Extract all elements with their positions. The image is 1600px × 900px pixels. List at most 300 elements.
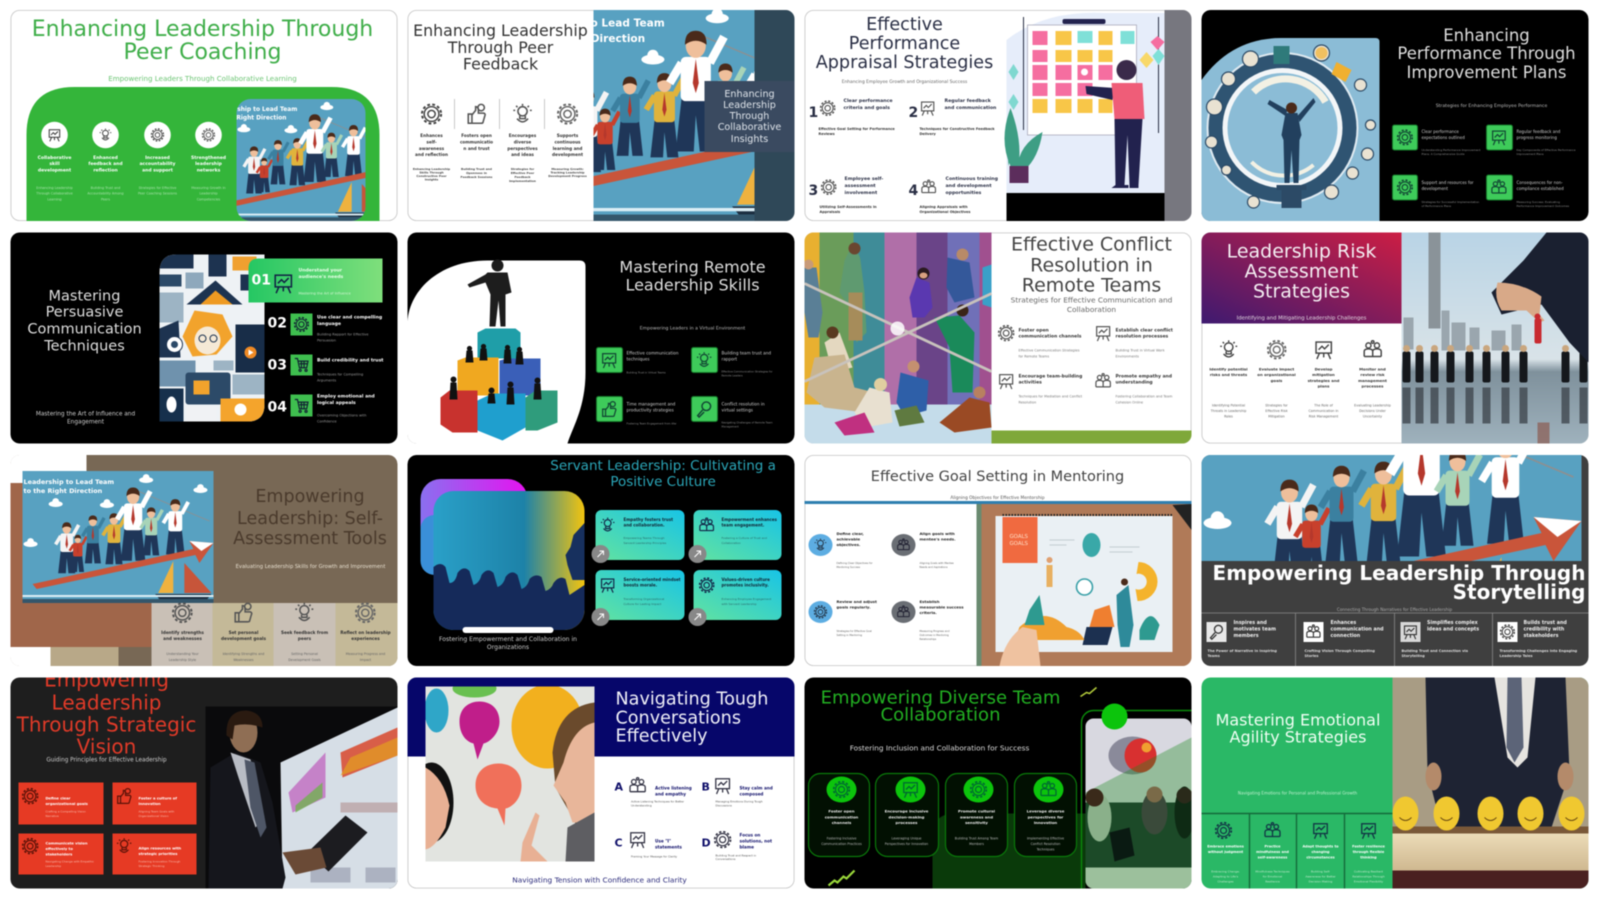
column: reflection: Reflect on leadership	[340, 630, 391, 635]
item 1: 1	[808, 105, 818, 121]
title: Leadership Skills	[625, 276, 760, 294]
item A: Active Listening Techniques for Better	[631, 800, 685, 804]
photo: suit and smiley eggs	[1392, 678, 1588, 888]
item C: Use "I"	[655, 838, 671, 844]
column sublabels: Threats in Leadership	[1210, 409, 1246, 413]
card: empowerment: Empowerment enhances	[722, 517, 777, 522]
column: diverse perspectives: Conflict Resolution	[1031, 842, 1060, 846]
item: communication	[596, 348, 679, 374]
illustration: team on seesaw: to the Right Direction	[214, 115, 286, 121]
column: open channels: channels	[832, 820, 852, 825]
column sublabels: Mitigation	[1268, 414, 1285, 418]
column labels: processes	[1362, 384, 1384, 389]
subtitle: Enhancing Employee Growth and Organizational Success	[842, 79, 968, 85]
column: builds trust	[1498, 620, 1578, 658]
subtitle: Connecting Through Narratives for Effective Leadership	[1337, 607, 1452, 612]
item: define objectives: Mentoring Success	[836, 565, 861, 569]
illustration: team on seesaw: to the Right Direction	[516, 33, 645, 45]
item C: Framing Your Message for Clarity	[631, 854, 677, 858]
card: Empowering Leadership Through Strategic Vision	[10, 668, 398, 888]
callout: insights: Through	[729, 111, 769, 122]
item: empathy: Cohesion Online	[1116, 400, 1143, 404]
card: Effective Conflict Resolution in Remote Teams	[804, 232, 1192, 444]
column: inspires: motivates team	[1234, 627, 1276, 633]
icons row	[41, 122, 222, 148]
column labels	[1209, 366, 1387, 389]
column sublabels: Measuring Growth:	[551, 167, 584, 171]
box: define goals	[18, 782, 104, 824]
column: open channels	[808, 774, 870, 856]
card: service mindset: Transforming Organizational	[622, 597, 665, 601]
column: builds trust: credibility with	[1524, 627, 1565, 633]
item 4: opportunities	[946, 190, 982, 196]
title: Empowering Diverse Team	[821, 688, 1060, 708]
card: Enhancing Performance Through Improvement Plans	[1202, 10, 1588, 221]
title: Remote Teams	[1022, 274, 1161, 296]
column labels: communicatio	[460, 139, 493, 144]
column sublabels: Strategies for	[1265, 404, 1288, 408]
item: measurable criteria: Establish	[920, 599, 940, 604]
title: Leadership: Self-	[237, 509, 383, 529]
box: innovation: Foster a culture of	[138, 796, 177, 800]
card: empathy: Servant Leadership Principles	[624, 541, 667, 545]
title: Positive Culture	[610, 474, 716, 490]
card: service mindset: boosts morale.	[624, 583, 658, 588]
gradient header	[1202, 232, 1402, 324]
column: resilience: Emotional Flexibility	[1354, 880, 1383, 884]
column sublabels: Risk Management	[1309, 414, 1339, 418]
title: Effective Conflict	[1011, 234, 1172, 256]
item: conflict resolution: virtual settings	[722, 408, 753, 412]
card: values culture: Values-driven culture	[722, 577, 770, 582]
item: measurable criteria: Relationships	[920, 637, 937, 641]
illustration: leader on colored blocks	[408, 260, 586, 444]
column sublabels: Uncertainty	[1363, 414, 1382, 418]
item: define objectives	[808, 531, 873, 569]
column: feedback: Setting Personal	[291, 652, 318, 656]
item: support and resources: of Performance Plans	[1422, 204, 1452, 208]
item: define objectives: Define clear,	[836, 531, 864, 536]
column: inclusive decisions: decision-making	[889, 814, 925, 819]
box: innovation: innovation	[138, 802, 161, 806]
item: review goals: Setting in Mentoring	[836, 633, 862, 637]
column: resilience: Cultivating Resilient	[1354, 870, 1384, 874]
column labels: Evaluate impact	[1259, 366, 1294, 372]
box: define goals: organizational goals	[46, 802, 89, 806]
subtitle: Identifying and Mitigating Leadership Challenges	[1237, 316, 1367, 322]
title: Empowering Leadership Through	[1213, 561, 1586, 585]
title: Performance Through	[1397, 44, 1576, 63]
box: define goals: Define clear	[46, 796, 71, 800]
column labels: skill	[49, 161, 60, 167]
item 3: Appraisals	[820, 210, 840, 214]
title: Enhancing Leadership Through	[32, 17, 373, 42]
illustration: silhouettes gradient panel	[420, 479, 584, 633]
column: inclusive decisions: processes	[896, 820, 918, 825]
item: consequences: compliance established	[1516, 186, 1564, 191]
subtitle: Strategies for Enhancing Employee Performance	[1436, 103, 1547, 109]
card: empowerment: Collaboration	[722, 541, 741, 545]
column: open channels: communication	[825, 814, 858, 819]
column labels: Collaborative	[38, 155, 71, 161]
item 1	[808, 98, 895, 136]
column sublabels: Accountability Among	[87, 192, 124, 196]
column labels: self-	[426, 139, 437, 144]
column: strengths: Leadership Style	[169, 658, 196, 662]
box: align resources: strategic priorities	[138, 852, 178, 856]
item: conflict resolution: Management	[722, 424, 739, 428]
card: values culture: promotes inclusivity.	[722, 583, 769, 588]
column: reflection: experiences	[351, 636, 380, 641]
zigzag accents	[828, 870, 854, 886]
illustration: team on seesaw: to the Right Direction	[24, 487, 103, 495]
callout: insights: Enhancing	[724, 89, 775, 100]
card: empathy: and collaboration.	[624, 523, 665, 528]
step 01 highlighted: audience's needs	[298, 274, 343, 280]
title: Vision	[77, 734, 136, 758]
item 2: Techniques for Constructive Feedback	[920, 127, 995, 131]
illustration: team on seesaw: Leadership to Lead Team	[24, 478, 114, 486]
item: regular feedback: Key Components of Effective Performance	[1516, 148, 1576, 152]
column labels: risks and threats	[1210, 372, 1248, 377]
title: Leadership Risk	[1227, 240, 1376, 262]
item: review goals: Strategies for Effective Goal	[836, 629, 872, 633]
subtitle: Evaluating Leadership Skills for Growth and Improvement	[236, 564, 385, 570]
column sublabels: Development Progress	[548, 174, 587, 178]
box: communicate vision: effectively to	[46, 847, 73, 851]
box: innovation: Aligning Team Goals with	[138, 810, 174, 814]
item: regular feedback: progress monitoring	[1516, 135, 1557, 140]
subtitle: Fostering Inclusion and Collaboration for Success	[850, 744, 1029, 752]
item A	[614, 778, 692, 808]
title: Mastering Emotional	[1216, 710, 1380, 730]
column sublabels: Implementation	[509, 179, 536, 183]
column: inspires: Inspires and	[1234, 620, 1267, 626]
illustration: people and crossing ropes	[804, 232, 1192, 444]
card: Servant Leadership Cultivating a Positive Culture	[408, 455, 794, 666]
column: embrace emotions: Embracing Change:	[1211, 870, 1240, 874]
title: Effective Goal Setting in Mentoring	[871, 469, 1124, 485]
column: simplifies: Building Trust and Connection via	[1402, 649, 1469, 653]
photo: businessman at chart screen	[206, 706, 398, 888]
title: Leadership	[52, 690, 161, 714]
column sublabels: Evaluating Leadership	[1354, 404, 1391, 408]
item 3: Utilizing Self-Assessments in	[820, 205, 877, 209]
dark side band	[754, 10, 794, 221]
title: Strategies	[1253, 280, 1350, 302]
column labels: Strengthened	[191, 155, 226, 161]
item: empathy: Promote empathy and	[1116, 374, 1172, 380]
column: open channels: Communication Practices	[821, 842, 862, 846]
box: align resources	[112, 834, 196, 874]
column sublabels: The Role of	[1313, 404, 1334, 408]
photo: hand choosing red figure	[1402, 232, 1588, 444]
item D: Building Trust and Respect in	[716, 854, 756, 858]
item: define objectives: objectives.	[836, 542, 861, 547]
column labels: on organizational	[1257, 372, 1296, 377]
card: Empowering Leadership Through Storytelling	[1202, 377, 1588, 666]
item 2: Regular feedback	[944, 98, 992, 104]
item: consequences	[1486, 175, 1570, 208]
card: Mastering Emotional Agility Strategies	[1202, 678, 1588, 888]
column: simplifies: ideas and concepts	[1427, 627, 1479, 633]
column: inclusive decisions: Leveraging Unique	[891, 836, 922, 840]
item: open channels: Foster open	[1018, 328, 1049, 334]
item: conflict resolution: Navigating Challenges of Remote Team	[722, 420, 773, 424]
item: time management	[596, 396, 677, 426]
callout: insights: Leadership	[723, 100, 776, 111]
column labels: Fosters open	[461, 133, 492, 138]
title: Resolution in	[1030, 254, 1153, 276]
item: consequences: Measuring Success: Evaluating	[1516, 200, 1560, 204]
item 2: and communication	[944, 105, 996, 111]
item: conflict resolution: Conflict resolution in	[722, 402, 765, 406]
icons row	[1220, 340, 1381, 359]
title: Enhancing	[1443, 26, 1530, 45]
card: values culture: Enhancing Employee Engagement	[722, 597, 772, 601]
title: Servant Leadership: Cultivating a	[550, 458, 776, 474]
column sublabels: Learning	[47, 197, 62, 201]
column sublabels: Measuring Growth in	[191, 186, 226, 190]
title: Feedback	[463, 54, 539, 74]
item: define objectives: Defining Clear Objectives for	[836, 561, 873, 565]
dividers grid	[1202, 613, 1588, 666]
column: diverse perspectives: Techniques	[1036, 848, 1055, 852]
column: builds trust: stakeholders	[1524, 633, 1559, 639]
item: align goals: Align goals with	[920, 531, 955, 536]
column: inclusive decisions: Encourage inclusive	[885, 808, 929, 814]
item A: and empathy	[655, 792, 686, 796]
item: communication: Effective communication	[626, 350, 679, 356]
item: clear expectations: Understanding Performance Improvement	[1422, 148, 1481, 152]
item 4	[908, 176, 998, 214]
item: align goals	[892, 531, 956, 569]
column labels: mitigation	[1312, 372, 1335, 377]
step 04: logical appeals	[317, 400, 356, 406]
column: resilience: Relationships Through	[1352, 874, 1385, 878]
column sublabels: Leadership	[199, 192, 218, 196]
column: embrace emotions: Challenges	[1218, 880, 1234, 884]
column labels: Enhanced	[93, 155, 118, 161]
step 04	[268, 394, 375, 424]
step 01 highlighted: Mastering the Art of Influence	[298, 292, 351, 296]
column labels: learning and	[553, 146, 582, 151]
card: service mindset: Service-oriented mindset	[624, 577, 681, 582]
title: Agility Strategies	[1230, 728, 1366, 746]
item D: Focus on	[740, 832, 760, 838]
item A: Understanding	[631, 804, 652, 808]
column sublabels: Strategies for Effective	[139, 186, 176, 190]
item: review goals: goals regularly.	[836, 604, 871, 610]
column: adapt thoughts: Awareness for Better	[1305, 874, 1336, 878]
column labels: awareness	[419, 146, 445, 151]
column: communication: communication and	[1330, 627, 1384, 633]
item: measurable criteria: criteria.	[920, 610, 937, 615]
item B: composed	[740, 792, 763, 796]
card: service mindset	[592, 570, 684, 626]
title: Appraisal Strategies	[816, 53, 993, 73]
title: Empowering	[44, 668, 169, 692]
title: Mastering Remote	[619, 258, 766, 276]
column sublabels: Insights	[425, 178, 438, 182]
item: align goals: Needs and Aspirations	[920, 565, 948, 569]
column: inclusive decisions: Perspectives for Innovation	[885, 842, 928, 846]
item: empathy	[1096, 374, 1173, 404]
column sublabels: Feedback Sessions	[461, 175, 493, 179]
box: define goals: Narrative	[46, 814, 59, 818]
column: simplifies: Simplifies complex	[1427, 620, 1479, 626]
item A: A	[614, 780, 624, 794]
column sublabels: Tracking Leadership	[550, 170, 585, 174]
item 4: and development	[946, 183, 992, 189]
column: inspires: Teams	[1208, 654, 1220, 658]
column sublabels: Strategies for	[511, 167, 535, 171]
subtitle: Navigating Emotions for Personal and Professional Growth	[1238, 790, 1357, 796]
phone photo: team meeting	[1082, 710, 1212, 900]
navy header	[408, 678, 794, 756]
column: diverse perspectives: perspectives for	[1028, 814, 1063, 819]
callout: insights: Insights	[731, 134, 768, 145]
column: simplifies: Storytelling	[1402, 654, 1425, 658]
item: define objectives: achievable	[836, 536, 860, 542]
illustration: team on seesaw	[236, 98, 366, 222]
column: embrace emotions: Embrace emotions	[1207, 844, 1244, 848]
illustration: team close-up	[1200, 454, 1582, 562]
item: open channels: communication channels	[1018, 334, 1082, 340]
item: empathy: understanding	[1116, 380, 1153, 386]
item: clear expectations: Plans: A Comprehensive Guide	[1422, 152, 1465, 156]
column: adapt thoughts: circumstances	[1306, 856, 1335, 860]
item 2	[908, 98, 996, 136]
column: simplifies	[1400, 620, 1479, 658]
column: resilience	[1352, 824, 1386, 884]
column labels: Enhances	[420, 133, 443, 138]
item C: statements	[655, 844, 682, 850]
item C: C	[614, 836, 623, 850]
item: clear processes: Environments	[1116, 354, 1139, 358]
illustration: team on seesaw: Leadership to Lead Team	[214, 107, 297, 113]
item: review goals: Review and adjust	[836, 599, 877, 604]
column: feedback	[274, 603, 336, 666]
column labels: development	[552, 152, 583, 157]
item: support and resources: Strategies for Successful Implementation	[1422, 200, 1480, 204]
item 1: Reviews	[818, 132, 835, 136]
illustration: collage	[160, 254, 264, 422]
column: reflection: Measuring Progress and	[346, 652, 385, 656]
card: values culture: with Servant Leadership	[722, 602, 757, 606]
title: Improvement Plans	[1407, 63, 1566, 82]
item: time management: productivity strategies	[626, 408, 674, 412]
box: communicate vision: Leadership	[46, 864, 61, 868]
column: open channels: Foster open	[828, 808, 855, 814]
item D: D	[702, 836, 711, 850]
column: communication: Enhances	[1330, 620, 1356, 626]
card: Effective Performance Appraisal Strategies	[804, 10, 1192, 221]
item 4: Aligning Appraisals with	[920, 205, 968, 209]
item D: solutions, not	[740, 838, 772, 844]
item 1: criteria and goals	[844, 105, 890, 111]
column: cultural awareness: awareness and	[960, 814, 993, 819]
item: team building: Encourage team-building	[1018, 374, 1082, 380]
card: Effective Goal Setting in Mentoring	[804, 455, 1192, 666]
box: communicate vision: Navigating Change with Empathic	[46, 860, 94, 864]
column: open channels: Fostering Inclusive	[827, 836, 856, 840]
column sublabels: Enhancing Leadership	[36, 186, 73, 190]
item: support and resources: development	[1422, 186, 1448, 191]
column: mindfulness: for Emotional	[1263, 874, 1282, 878]
card: empowerment: Fostering a Culture of Trust and	[722, 536, 767, 540]
column labels: leadership	[195, 161, 223, 167]
column sublabels: Effective Risk	[1265, 409, 1288, 413]
item: measurable criteria	[892, 599, 964, 641]
column sublabels: Building Trust and	[91, 186, 120, 190]
subtitle: Aligning Objectives for Effective Mentorship	[950, 495, 1045, 501]
illustration: man in time wheel	[1202, 38, 1380, 221]
column: cultural awareness	[946, 774, 1008, 856]
column labels: and ideas	[511, 152, 534, 157]
step 03: 03	[268, 358, 287, 374]
column sublabels: Peers	[101, 197, 110, 201]
title: Collaboration	[881, 704, 1000, 726]
column: mindfulness	[1255, 823, 1290, 884]
column: diverse perspectives: innovation	[1034, 820, 1057, 825]
column: resilience: Foster resilience	[1352, 844, 1386, 848]
column: goals: Identifying Strengths and	[223, 652, 264, 656]
title: Conversations	[616, 708, 741, 728]
title: Peer Coaching	[124, 40, 281, 65]
column: feedback: Seek feedback from	[281, 630, 329, 635]
item B	[702, 779, 773, 808]
step 03: Build credibility and trust	[317, 358, 384, 364]
item: support and resources: Support and resources for	[1422, 180, 1474, 185]
box: align resources: Fostering Innovation Through	[138, 860, 181, 864]
item 2: 2	[908, 105, 918, 121]
item: consequences: Performance Improvement Outcomes	[1516, 204, 1570, 208]
item C	[614, 833, 682, 858]
column labels: Encourages	[509, 133, 537, 138]
title: Enhancing Leadership	[413, 21, 588, 40]
step 02: 02	[268, 316, 287, 332]
item: regular feedback: Regular feedback and	[1516, 129, 1561, 134]
title: Empowering	[255, 487, 365, 507]
column: cultural awareness: Promote cultural	[958, 808, 995, 814]
column: strengths	[152, 603, 212, 666]
green panel	[26, 87, 380, 221]
column: reflection: Impact	[360, 658, 372, 662]
card: Mastering Persuasive Communication Techniques	[10, 232, 398, 444]
subtitle: Strategies for Effective Communication and	[1011, 296, 1173, 304]
box: align resources: Strategic Thinking	[138, 864, 165, 868]
box: communicate vision	[18, 834, 104, 874]
column: diverse perspectives: Implementing Effective	[1027, 836, 1064, 840]
illustration: man at task board	[1004, 10, 1192, 221]
column labels: perspectives	[507, 146, 538, 151]
item D: Conversations	[716, 857, 736, 861]
item: team building: Resolution	[1018, 400, 1036, 404]
item: measurable criteria: Measuring Progress and	[920, 629, 950, 633]
step 03	[268, 354, 384, 382]
column: communication: connection	[1330, 633, 1361, 639]
illustration: team on seesaw	[22, 470, 214, 604]
card: Empowering Diverse Team Collaboration	[804, 678, 1212, 900]
column: strengths: Identify strengths	[161, 630, 204, 635]
title: Navigating Tough	[616, 690, 768, 710]
card: Mastering Remote Leadership Skills	[408, 232, 794, 444]
item: team trust: Remote Leaders	[722, 374, 743, 378]
subtitle: Navigating Tension with Confidence and Clarity	[512, 876, 687, 884]
column sublabels: Competencies	[197, 197, 221, 201]
item 1: Clear performance	[844, 98, 893, 104]
